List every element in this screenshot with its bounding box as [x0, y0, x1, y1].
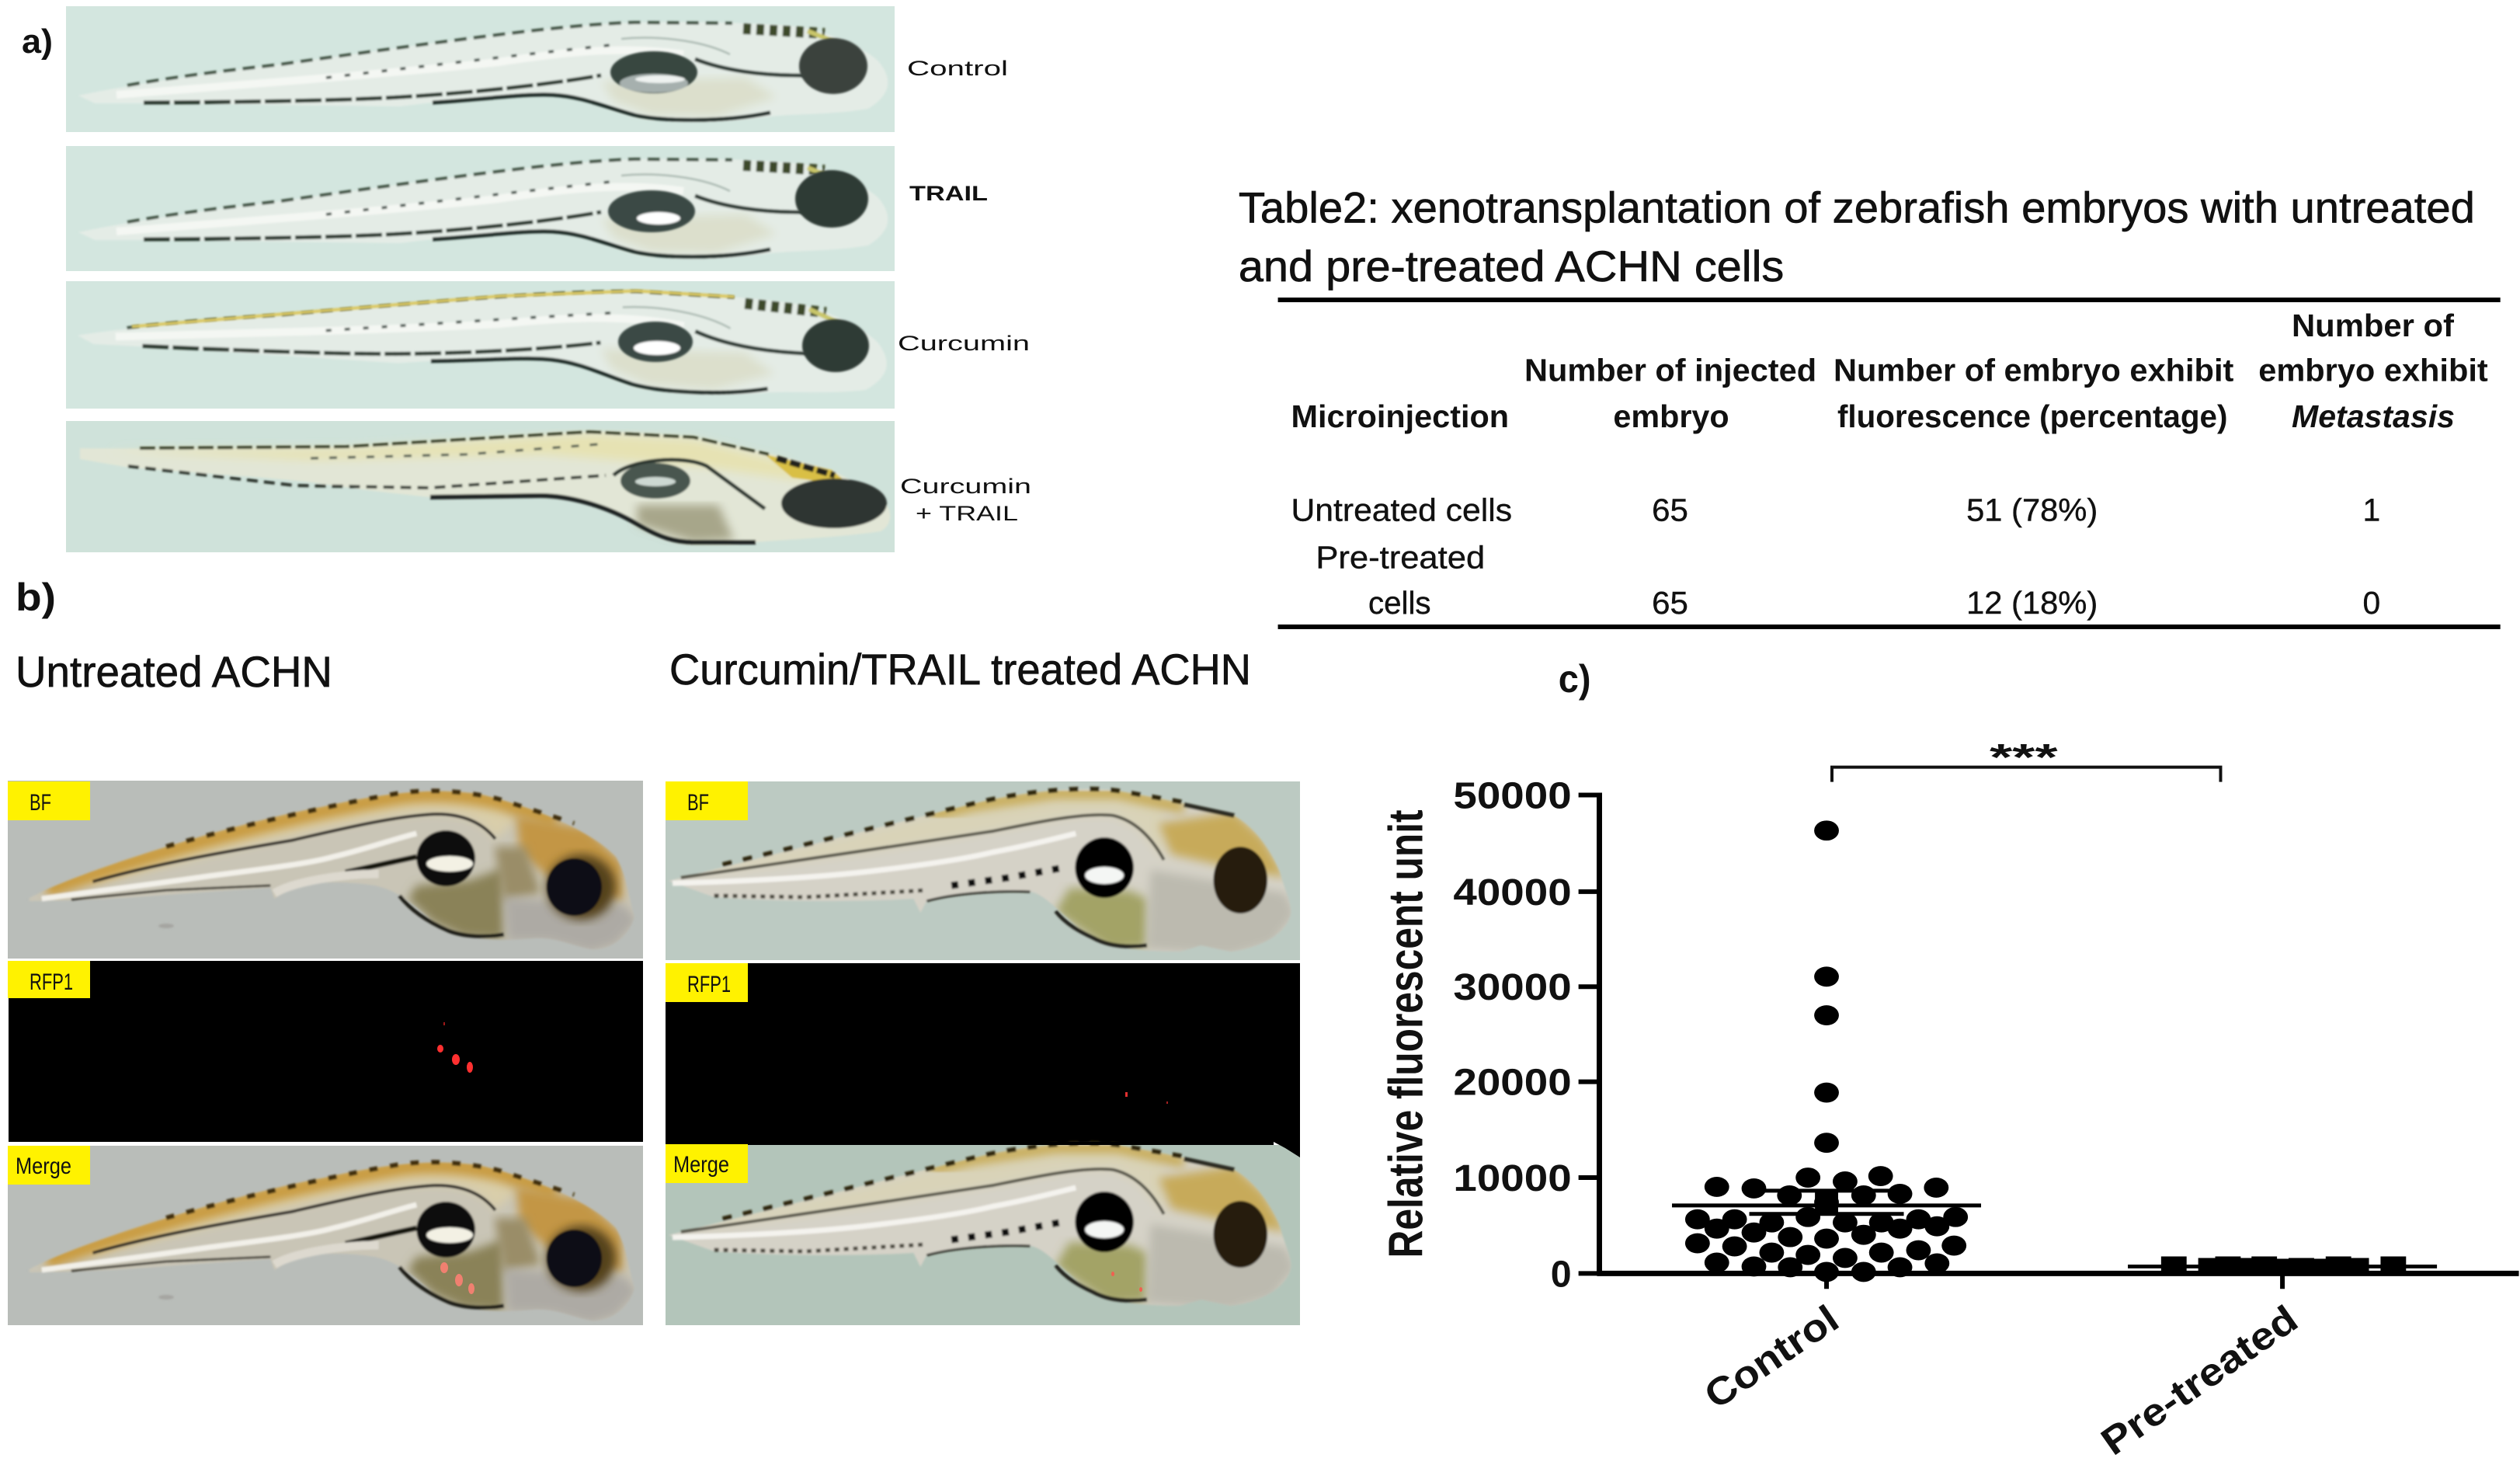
y axis labels: 50000: [1453, 775, 1572, 816]
table header row: Number of embryo exhibit: [1834, 353, 2234, 388]
table row: untreated cells: [1291, 492, 2380, 528]
table header row: Metastasis: [2292, 398, 2455, 434]
y axis labels: [1453, 775, 1572, 1295]
photo: curcumin plus TRAIL larva: [66, 421, 895, 552]
photo: untreated merge: Merge: [16, 1154, 71, 1179]
x axis label: Pre-treated: Pre-treated: [2093, 1296, 2306, 1463]
table row: pre-treated cells: cells: [1368, 585, 1431, 621]
panel letter c: c): [1559, 657, 1591, 701]
table header row: embryo: [1613, 398, 1729, 434]
photo: curcumin larva: [66, 262, 895, 409]
photo: treated BF: [666, 781, 1300, 960]
y axis labels: 30000: [1453, 967, 1572, 1008]
significance bracket: [1832, 738, 2220, 782]
heading: Untreated ACHN: Untreated ACHN: [16, 647, 332, 696]
table row: untreated cells: 1: [2363, 492, 2380, 528]
y axis labels: 20000: [1453, 1063, 1572, 1104]
photo: treated RFP1: [666, 963, 1300, 1142]
mean line: pre-treated: [2128, 1265, 2437, 1268]
table 2 with title: [1239, 184, 2501, 629]
photo: untreated RFP1: [8, 961, 643, 1142]
photo: treated BF: BF: [687, 790, 709, 816]
table header row: fluorescence (percentage): [1837, 398, 2227, 434]
table title: and pre-treated ACHN cells: [1239, 242, 1784, 291]
photo: treated merge: Merge: [673, 1152, 729, 1178]
data points: control: [1685, 820, 1968, 1282]
panel letter a: a): [22, 23, 53, 61]
table header row: [1291, 308, 2488, 434]
table header row: embryo exhibit: [2258, 353, 2488, 388]
heading: Curcumin/TRAIL treated ACHN: Curcumin/TRAIL treated ACHN: [669, 645, 1251, 694]
table row: pre-treated cells: Pre-treated: [1316, 539, 1485, 575]
photo: treated RFP1: RFP1: [687, 972, 731, 997]
y axis labels: 0: [1551, 1254, 1572, 1295]
table row: pre-treated cells: 12 (18%): [1966, 585, 2098, 621]
x axis label: Control: Control: [1697, 1296, 1847, 1418]
table row: pre-treated cells: 0: [2363, 585, 2380, 621]
photo: untreated BF: BF: [30, 790, 51, 816]
photo: untreated BF: [8, 781, 643, 959]
table row: untreated cells: 51 (78%): [1966, 492, 2098, 528]
panel c: fluorescence scatter chart: [1380, 657, 2519, 1463]
photo: untreated RFP1: RFP1: [30, 969, 73, 995]
table row: untreated cells: 65: [1652, 492, 1688, 528]
label: Control: Control: [907, 57, 1008, 80]
significance bracket: ***: [1990, 738, 2058, 779]
mean and error bars: control: [1672, 1191, 1981, 1214]
label: Curcumin + TRAIL: + TRAIL: [916, 502, 1018, 525]
photo: control larva: [66, 6, 895, 132]
axes and ticks: [1579, 792, 2519, 1289]
label: Curcumin + TRAIL: Curcumin: [900, 475, 1031, 498]
table header row: Number of: [2292, 308, 2454, 343]
panel b: RFP imaging of injected embryos: [8, 576, 1300, 1325]
panel letter b: b): [16, 576, 56, 619]
y axis labels: 10000: [1453, 1158, 1572, 1199]
label: Curcumin: Curcumin: [898, 332, 1030, 355]
panel a: larval zebrafish treatments: [22, 6, 1031, 552]
y axis title: Relative fluorescent unit: [1380, 809, 1434, 1258]
label: Curcumin + TRAIL: [900, 475, 1031, 525]
table row: pre-treated cells: [1316, 539, 2380, 621]
table title: [1239, 184, 2475, 291]
photo: untreated merge: [8, 1146, 643, 1325]
photo: TRAIL larva: [66, 146, 895, 271]
table header row: Number of injected: [1524, 353, 1816, 388]
table title: Table2: xenotransplantation of zebrafish embryos with untreated: [1239, 184, 2475, 232]
data points: pre-treated: [2161, 1256, 2406, 1275]
y axis labels: 40000: [1453, 872, 1572, 913]
label: TRAIL: TRAIL: [909, 182, 988, 205]
photo: treated merge: [666, 1142, 1300, 1325]
table row: untreated cells: Untreated cells: [1291, 492, 1512, 528]
table header row: Microinjection: [1291, 398, 1509, 434]
table row: pre-treated cells: 65: [1652, 585, 1688, 621]
